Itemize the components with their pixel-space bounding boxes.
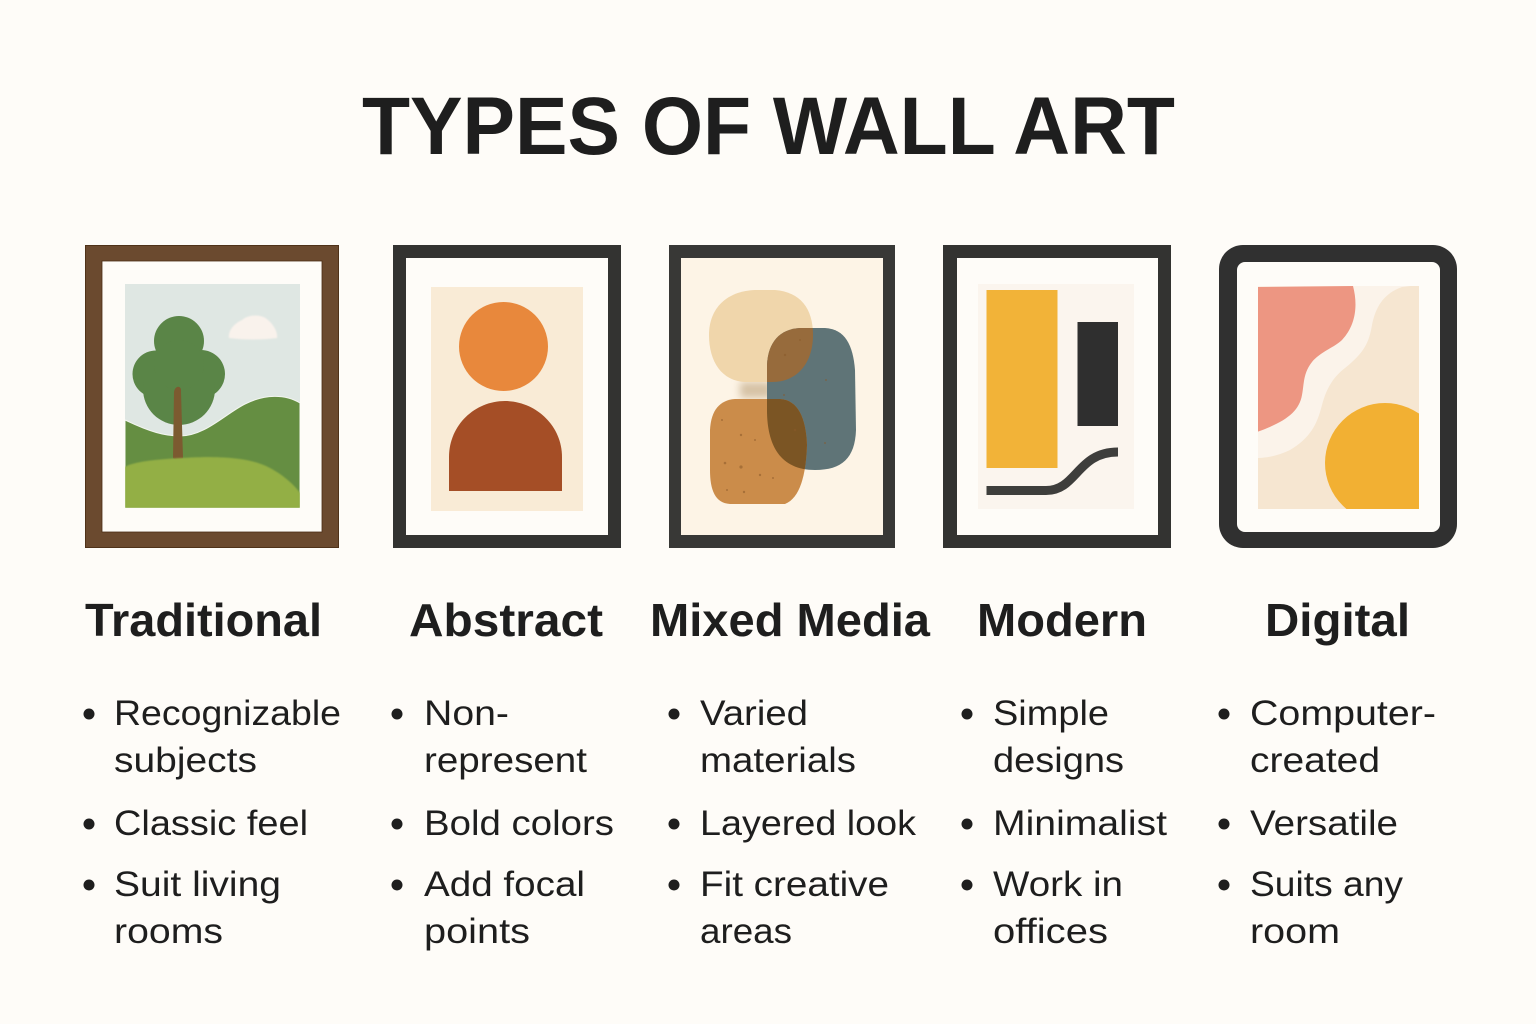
heading: Mixed Media: [650, 594, 930, 646]
bullet list: Versatile: [1250, 804, 1398, 843]
bullet list: [84, 694, 341, 951]
column: mixed media: [650, 594, 930, 951]
bullet list: created: [1250, 741, 1380, 780]
bullet list: room: [1250, 912, 1340, 951]
column: abstract: [392, 594, 614, 951]
frame: dark: [393, 245, 621, 548]
front hill: [125, 457, 300, 508]
rust arch: [449, 401, 562, 491]
bullet list: Recognizable: [114, 694, 341, 733]
bullet list: offices: [993, 912, 1108, 951]
soft shadow: [740, 382, 772, 398]
bullet list: [668, 694, 917, 951]
blue shape: [767, 328, 856, 470]
yellow circle: [1325, 403, 1419, 509]
frame: rounded screen: [1219, 245, 1457, 548]
heading: Traditional: [85, 594, 322, 646]
column: modern: [962, 594, 1167, 951]
mat: digital: [1237, 262, 1440, 532]
panel: abstract: [393, 245, 621, 548]
frame: dark: [943, 245, 1171, 548]
overlaps: [767, 328, 813, 470]
panel: modern: [943, 245, 1171, 548]
bullet list: Minimalist: [993, 804, 1167, 843]
artwork: geometric: [978, 284, 1134, 509]
bullet list: [962, 694, 1167, 951]
bullet list: Bold colors: [424, 804, 614, 843]
bullet list: [1218, 694, 1436, 951]
heading: Abstract: [409, 594, 603, 646]
back hill: [125, 396, 300, 508]
column: traditional: [84, 594, 341, 951]
bullet list: subjects: [114, 741, 257, 780]
bullet list: Suits any: [1250, 865, 1404, 904]
title: TYPES OF WALL ART: [362, 81, 1175, 172]
curved line: [986, 452, 1118, 490]
pink shape: [1257, 286, 1355, 432]
column: digital: [1218, 594, 1436, 951]
bullet list: Layered look: [700, 804, 917, 843]
bullet list: areas: [700, 912, 792, 951]
bullet list: Classic feel: [114, 804, 308, 843]
heading: Modern: [977, 594, 1147, 646]
tan shape: [709, 290, 813, 382]
artwork: circle and arch: [431, 287, 583, 511]
black rectangle: [1078, 322, 1118, 426]
heading: Digital: [1265, 594, 1410, 646]
bullet list: represent: [424, 741, 587, 780]
bullet list: Computer-: [1250, 694, 1436, 733]
bullet list: points: [424, 912, 530, 951]
tree trunk: [173, 387, 183, 460]
bullet list: Simple: [993, 694, 1109, 733]
bullet list: Add focal: [424, 865, 585, 904]
bullet list: materials: [700, 741, 856, 780]
bullet list: Non-: [424, 694, 509, 733]
panel: digital: [1219, 245, 1457, 548]
mat: modern: [957, 258, 1158, 535]
cloud: [229, 316, 277, 340]
yellow rectangle: [986, 290, 1058, 468]
artwork: organic shapes: [1258, 286, 1419, 509]
bullet list: [392, 694, 614, 951]
bullet list: rooms: [114, 912, 223, 951]
orange circle: [459, 302, 548, 391]
artwork: landscape: [125, 284, 300, 508]
bullet list: Suit living: [114, 865, 281, 904]
tan wave: [1257, 285, 1419, 509]
orange shape: [710, 399, 807, 504]
mat: abstract: [406, 258, 608, 535]
panel: mixed media: [669, 245, 895, 548]
bullet list: Work in: [993, 865, 1123, 904]
bullet list: designs: [993, 741, 1124, 780]
bullet list: Fit creative: [700, 865, 889, 904]
tree crown: [132, 316, 225, 425]
frame: brown wood: [86, 246, 338, 548]
bullet list: Varied: [700, 694, 808, 733]
frame: dark: [669, 245, 895, 548]
mat: traditional: [102, 261, 322, 532]
panel: traditional: [86, 246, 338, 548]
speckles: [721, 339, 827, 493]
artwork: layered shapes: [681, 258, 883, 535]
